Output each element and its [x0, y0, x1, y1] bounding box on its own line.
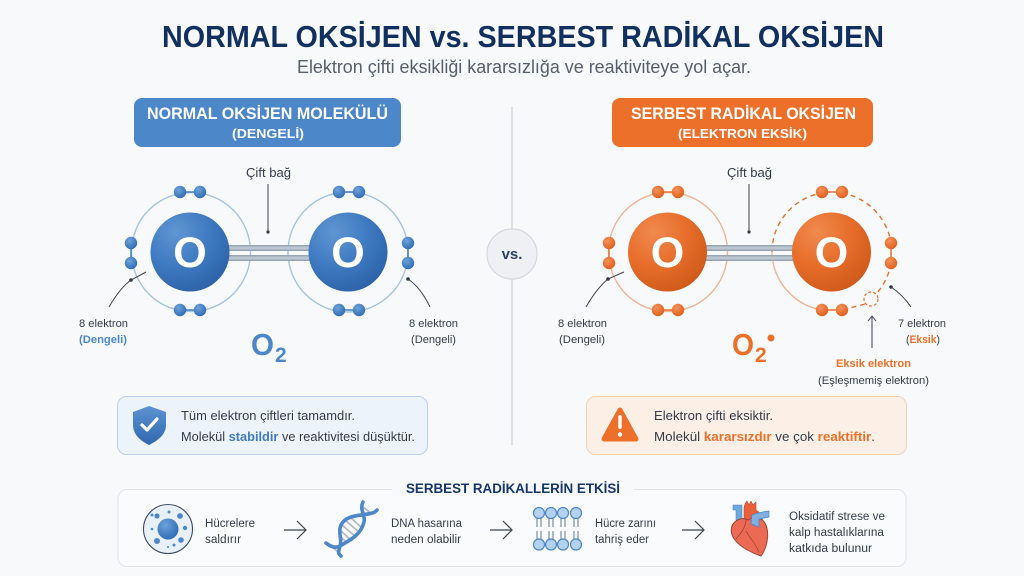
- arrow: [682, 521, 704, 539]
- callout: stable: Tüm elektron çiftleri tamamdır.: [181, 409, 355, 423]
- annotation: 7 electrons: (Eksik): [906, 334, 940, 346]
- text: attacks cells: Hücrelere: [205, 518, 255, 530]
- icon: DNA: [326, 502, 377, 556]
- annotation: left 8 electrons: (Dengeli): [559, 334, 605, 346]
- icon: shield: [133, 406, 166, 445]
- subtitle: Elektron çifti eksikliği kararsızlığa ve reaktiviteye yol açar.: [297, 57, 751, 77]
- annotation: right 8 electrons: (Dengeli): [411, 334, 456, 346]
- text: oxidative stress: katkıda bulunur: [789, 543, 872, 555]
- formula: O2: O: [251, 327, 274, 362]
- formula: O2: [251, 327, 287, 367]
- text: membrane damage: Hücre zarını: [595, 518, 656, 530]
- text: DNA damage: DNA hasarına: [391, 518, 463, 530]
- text: oxidative stress: [789, 511, 885, 555]
- callout: unstable: Elektron çifti eksiktir.: [654, 409, 773, 423]
- callout: unstable: Molekül kararsızdır ve çok reaktiftir .: [654, 430, 875, 444]
- text: oxidative stress: Oksidatif strese ve: [789, 511, 885, 523]
- arrow: [284, 521, 306, 539]
- heading: free radical oxygen: (ELEKTRON EKSİK): [678, 126, 807, 141]
- panel: normal oxygen: [79, 98, 458, 454]
- text: DNA damage: neden olabilir: [391, 534, 461, 546]
- icon: cell membrane: [534, 508, 582, 550]
- annotation: 7 electrons: [889, 285, 946, 346]
- heading: effects: SERBEST RADİKALLERİN ETKİSİ: [406, 481, 620, 496]
- annotation: 7 electrons: 7 elektron: [898, 318, 946, 330]
- text: oxidative stress: kalp hastalıklarına: [789, 527, 885, 539]
- arrow: [490, 521, 512, 539]
- label: double bond: [246, 166, 291, 234]
- heading: free radical oxygen: SERBEST RADİKAL OKSİJEN: [631, 104, 856, 123]
- diagram: O2 molecule: [125, 186, 414, 316]
- heading: normal oxygen molecule: (DENGELİ): [232, 126, 304, 141]
- panel: effects of free radicals: [118, 481, 906, 566]
- formula: O2 radical: [732, 327, 774, 367]
- annotation: left 8 electrons: [558, 272, 624, 346]
- annotation: missing electron: Eksik elektron: [836, 358, 911, 370]
- annotation: right 8 electrons: [406, 277, 458, 346]
- text: membrane damage: [595, 518, 656, 546]
- formula: O2 radical: O: [732, 327, 754, 362]
- label: double bond: [727, 166, 772, 234]
- callout: stable: Molekül stabildir ve reaktivitesi düşüktür.: [181, 430, 415, 444]
- annotation: missing electron: [818, 316, 929, 387]
- text: attacks cells: saldırır: [205, 534, 241, 546]
- panel: free radical oxygen: [558, 98, 946, 454]
- vs. badge: vs.: [502, 246, 522, 263]
- formula: O2 radical: 2: [755, 344, 767, 367]
- icon: warning triangle: [604, 410, 636, 439]
- annotation: left 8 electrons: (Dengeli): [79, 334, 127, 346]
- text: DNA damage: [391, 518, 463, 546]
- text: attacks cells: [205, 518, 255, 546]
- diagram: O2 molecule: O: [173, 229, 207, 277]
- annotation: missing electron: (Eşleşmemiş elektron): [818, 375, 929, 387]
- annotation: left 8 electrons: 8 elektron: [79, 318, 128, 330]
- vs. badge: [487, 229, 537, 279]
- diagram: O2 molecule: O: [331, 229, 365, 277]
- annotation: left 8 electrons: 8 elektron: [558, 318, 607, 330]
- text: membrane damage: tahriş eder: [595, 534, 649, 546]
- icon: heart: [731, 501, 769, 556]
- diagram: radical molecule: O: [815, 229, 848, 277]
- label: double bond: Çift bağ: [727, 166, 772, 180]
- label: double bond: Çift bağ: [246, 166, 291, 180]
- center divider: [511, 107, 513, 445]
- callout: unstable: [586, 396, 906, 454]
- icon: cell: [144, 504, 192, 554]
- diagram: radical molecule: O: [651, 229, 684, 277]
- formula: O2: 2: [275, 344, 287, 367]
- diagram: radical molecule: [603, 186, 897, 316]
- heading: normal oxygen molecule: NORMAL OKSİJEN MOLEKÜLÜ: [147, 104, 388, 123]
- heading: normal oxygen molecule: [134, 98, 401, 147]
- heading: free radical oxygen: [612, 98, 873, 147]
- annotation: right 8 electrons: 8 elektron: [409, 318, 458, 330]
- callout: stable: [118, 396, 428, 454]
- title: NORMAL OKSİJEN vs. SERBEST RADİKAL OKSİJEN: [162, 19, 884, 54]
- annotation: left 8 electrons: [79, 272, 146, 346]
